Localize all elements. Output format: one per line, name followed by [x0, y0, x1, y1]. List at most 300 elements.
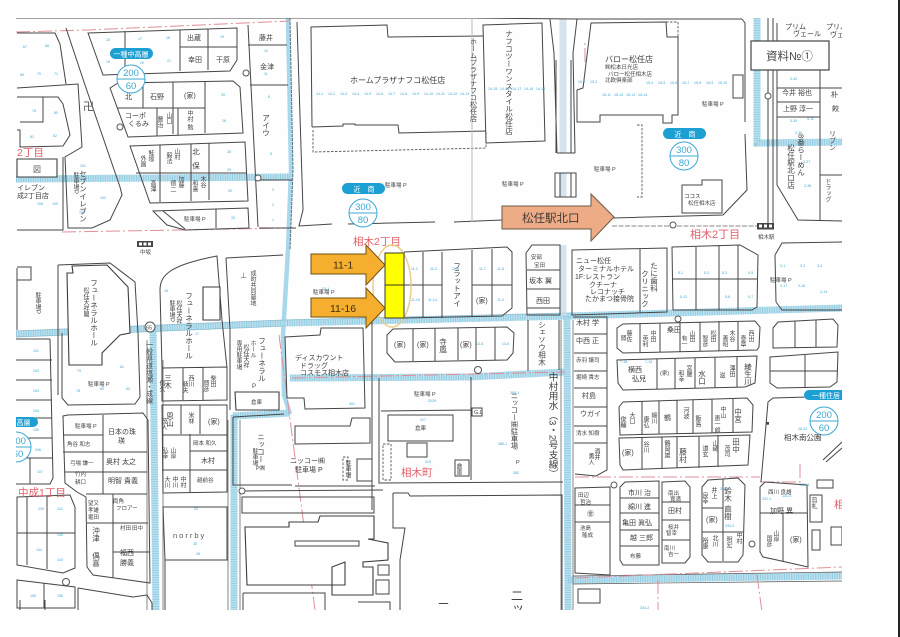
parcel numbers: 7-15	[645, 360, 652, 364]
map labels lower left: norrby	[173, 531, 206, 540]
map labels lower left: 日本の珠	[108, 427, 136, 436]
map labels centre: (家)	[417, 340, 429, 349]
parcel numbers: 330-2	[725, 524, 734, 528]
map labels centre: 中村用水（3・2号支線）	[546, 371, 558, 479]
map labels top left	[17, 33, 274, 472]
map labels top left: ニッコー	[256, 433, 266, 463]
map labels right: ヴェ	[830, 30, 844, 39]
map labels right: 駐車場 P	[594, 165, 616, 173]
parcel numbers: 105	[33, 428, 39, 432]
parcel numbers: 15-10	[718, 81, 727, 85]
map labels centre: ターミナルホテル	[578, 264, 634, 273]
map labels lower left: 勝義	[120, 558, 134, 567]
map labels lower left	[67, 374, 220, 568]
parcel numbers: 68	[45, 44, 49, 48]
map labels centre: (家)	[476, 296, 488, 305]
zone pill: 一種住居: 一種住居	[812, 391, 840, 400]
parcel numbers: 385-1	[510, 391, 519, 395]
map labels top left: 出蔵	[187, 33, 201, 42]
map labels right: 木村 学	[576, 318, 599, 327]
map labels centre: レコナッチ	[590, 288, 625, 296]
map labels top left: 保	[191, 162, 200, 171]
map labels lower left: 岡本 和久	[193, 439, 217, 447]
map labels right: 道玄	[701, 444, 708, 458]
map labels right: プリム	[826, 23, 847, 31]
map labels right: 南川	[664, 544, 675, 552]
map labels lower left: (家)	[208, 417, 220, 426]
map labels lower left: 耕口	[75, 478, 86, 486]
map labels right: 滋	[718, 371, 725, 379]
parcel numbers: 3-14	[820, 290, 827, 294]
parcel numbers: 331-1	[762, 497, 771, 501]
map labels lower left: 両角	[113, 497, 124, 505]
parcel numbers: 102	[100, 196, 106, 200]
zone circle: 300/80 right: 80	[679, 158, 689, 169]
map labels right: 桑田	[667, 325, 681, 334]
parcel numbers: 382	[513, 471, 519, 475]
map labels lower left: 瑛	[118, 436, 125, 445]
map labels right: 今井 裕也	[782, 88, 812, 97]
parcel numbers: 3-38	[795, 131, 802, 135]
map labels top left: 松任天祥閣	[82, 286, 89, 318]
map labels centre: コスモス相木店	[300, 368, 349, 377]
map labels centre: 坂本 翼	[529, 276, 552, 285]
map labels right: 駐車場 P	[770, 276, 792, 284]
map labels centre	[290, 30, 658, 615]
parcel numbers: 81	[120, 365, 124, 369]
map labels top left: 北	[191, 148, 200, 157]
map labels right: 明宏	[725, 536, 732, 549]
map labels top left: 金津	[260, 62, 274, 71]
map labels right: 西川 良雄	[768, 488, 792, 496]
parcel numbers: 2029	[428, 399, 436, 403]
parcel numbers: 104	[33, 409, 39, 413]
map labels centre: (家)	[460, 340, 472, 349]
map labels right: 酒井	[593, 447, 600, 461]
map labels lower left: 村田	[120, 524, 131, 532]
map labels centre: P	[516, 460, 520, 466]
parcel numbers: 139	[38, 507, 44, 511]
parcel numbers: 14-12	[448, 92, 457, 96]
parcel numbers: 14-19	[536, 87, 545, 91]
parcel numbers: 14-15	[488, 87, 497, 91]
map labels lower left: 奥村 太之	[106, 457, 136, 466]
map labels lower left: 中川	[171, 475, 178, 488]
parcel numbers: 14-10	[424, 92, 433, 96]
parcel numbers: 11-2	[411, 267, 418, 271]
map labels centre: G.L	[474, 410, 483, 416]
parcel numbers: 19	[220, 35, 224, 39]
map labels centre: シェソウ相木	[537, 321, 546, 367]
map labels top left: 中村	[186, 109, 193, 122]
parcel numbers: 8	[268, 95, 270, 99]
parcel numbers: 3	[272, 188, 274, 192]
map labels lower left: 柴田	[209, 374, 216, 388]
red district names: 相	[834, 498, 844, 511]
arrow: 11-16: 11-16	[330, 303, 356, 315]
parcel numbers: 3-36	[804, 184, 811, 188]
map labels right: ヴェール	[793, 29, 821, 38]
parcel numbers: 35	[193, 542, 197, 546]
parcel numbers: 14-7	[388, 92, 395, 96]
map labels right: 良幸	[701, 491, 708, 505]
red district names: 相木2丁目	[690, 228, 740, 241]
parcel numbers: 2	[272, 203, 274, 207]
map labels right: 餃	[832, 105, 839, 113]
zone pill: 近商 right	[663, 128, 706, 139]
parcel numbers: 14-2	[328, 92, 335, 96]
parcel numbers: 15-3	[590, 80, 597, 84]
parcel numbers: 3-39	[790, 119, 797, 123]
zone pill: 近商 left	[342, 183, 385, 194]
map labels top left: 毅法	[165, 151, 172, 165]
map labels centre: クチーナ	[589, 281, 617, 289]
map labels lower left: 信久	[158, 379, 165, 393]
map labels top left: 駐車場	[251, 447, 258, 467]
zone pill: lower left: 中高層	[10, 418, 30, 427]
map labels right: 宮腰	[685, 364, 692, 378]
map labels right: 河波	[682, 406, 689, 420]
parcel numbers: 11-7	[479, 267, 486, 271]
map labels lower left: 角谷 和志	[67, 440, 91, 448]
arrow: 松任駅北口	[502, 194, 614, 241]
parcel numbers: 30	[228, 189, 232, 193]
map labels right: 駐車場 P	[702, 100, 724, 108]
lot 11-1	[385, 253, 404, 285]
map labels right: 英利	[641, 334, 648, 347]
map labels right: 細川	[650, 411, 657, 424]
map labels top left: 勉	[186, 123, 193, 131]
zone circle: 300/80 right: 300	[676, 145, 692, 156]
parcel numbers: 5-8	[725, 295, 730, 299]
map labels centre: ニュー松任	[576, 256, 611, 265]
map labels top left: コーポ	[125, 112, 146, 120]
parcel numbers: 155	[30, 594, 36, 598]
parcel numbers: 7-16	[620, 360, 627, 364]
map labels top left: 加藤	[177, 175, 184, 189]
parcel numbers: 108	[37, 202, 43, 206]
map labels centre: ドラッグ	[300, 361, 328, 370]
map labels right: 赤羽 譲司	[576, 356, 600, 364]
parcel numbers: 15-13	[626, 93, 635, 97]
arrow: 松任駅北口: 松任駅北口	[522, 211, 580, 225]
map labels right: 俊輔	[619, 415, 626, 429]
map labels right: 上野 淳一	[783, 104, 813, 113]
map labels right: 越 三郎	[630, 533, 653, 542]
map labels right: 水口	[697, 369, 706, 385]
zone circle: 200/60 top left	[117, 65, 145, 93]
map labels lower left: 駐車場 P	[75, 422, 97, 430]
ellipse around lots	[373, 245, 411, 327]
map labels top left: くるみ	[128, 120, 149, 128]
parcel numbers: 5-5	[748, 271, 753, 275]
parcel numbers: 101	[33, 349, 39, 353]
map labels right: バロー松任店	[605, 54, 653, 64]
lot 11-16	[385, 285, 404, 318]
parcel numbers: 19	[106, 60, 110, 64]
red district names: 相木町	[401, 466, 433, 479]
centre left blocks	[16, 255, 292, 610]
red district names	[17, 147, 844, 511]
parcel numbers: 11-8	[497, 267, 504, 271]
map labels right: 雄	[663, 451, 670, 459]
map labels lower left: 三木	[163, 374, 172, 390]
map labels right: 清水 知樹	[576, 429, 600, 437]
map labels lower left: 堀田	[88, 513, 99, 521]
parcel numbers: 36	[196, 552, 200, 556]
parcel numbers: 80	[54, 111, 58, 115]
parcel numbers: 67	[23, 45, 27, 49]
map labels right: 田中	[732, 438, 740, 454]
map labels right: 勇人	[587, 452, 594, 465]
map labels right: 智幸	[666, 529, 678, 537]
map labels centre: ディスカウント	[295, 353, 344, 362]
map labels lower left: 田中	[132, 524, 143, 532]
map labels right: 直樹	[723, 504, 732, 521]
zone pill: 近商 right: 近 商	[674, 130, 696, 138]
parcel numbers: 331-4	[800, 483, 809, 487]
map labels right: ドラッグ	[824, 178, 831, 203]
map labels top left: ⊥	[240, 272, 247, 280]
map labels top left: フューネラルホール	[89, 279, 98, 346]
parcel numbers: 15-5	[658, 81, 665, 85]
zone circle: 300/80 left	[349, 199, 377, 227]
zone pill: 一種中高層	[110, 48, 153, 59]
zone circle: 300/80 right	[670, 142, 698, 170]
map labels right: 横西	[628, 365, 642, 374]
map labels right: 西出	[747, 330, 754, 343]
map labels top left: 高澤	[149, 179, 156, 193]
parcel numbers: 334-2	[640, 606, 649, 610]
zone circle: 300/80 left: 80	[358, 215, 368, 226]
map labels right: 北欧倶楽部	[605, 76, 633, 84]
parcel numbers: 33	[231, 216, 235, 220]
map labels top left: 卍	[83, 100, 94, 113]
map labels centre: ニッコー㈱駐車場	[510, 392, 520, 451]
parcel numbers: 79	[77, 369, 81, 373]
parcel numbers: 13-6	[502, 342, 509, 346]
highlighted lots	[373, 245, 411, 327]
map labels right: (家)	[706, 515, 718, 524]
parcel numbers: 14-11	[436, 92, 445, 96]
parcel numbers: 25	[221, 93, 225, 97]
map labels centre: ッ	[512, 601, 524, 615]
map labels right: 賢	[619, 335, 626, 342]
parcel numbers: 10	[264, 49, 268, 53]
parcel numbers: 103	[33, 389, 39, 393]
map labels top left: 幸田	[188, 56, 202, 64]
zone pill: 一種住居	[804, 390, 842, 400]
parcel numbers: 14-6	[376, 92, 383, 96]
map labels right: 桜井	[668, 523, 680, 531]
map labels right: 綿川 進	[628, 502, 651, 511]
map labels right: 朴	[831, 90, 838, 99]
map labels lower left: 沖津	[91, 526, 100, 543]
map labels top left: 和喜	[191, 179, 198, 193]
map labels right: 布藤	[630, 552, 642, 560]
map labels centre: 宝田	[534, 261, 545, 269]
map labels centre: 駐車場 P	[385, 181, 407, 189]
parcel numbers: 3-17	[780, 284, 787, 288]
parcel numbers: 70	[37, 72, 41, 76]
parcel numbers: 5	[270, 152, 272, 156]
box: 資料№①: 資料№①	[766, 49, 813, 63]
map labels lower left: 福西	[120, 548, 134, 557]
map labels right: 和幸	[677, 369, 684, 383]
map labels top left: 松任天祥	[242, 343, 249, 369]
map labels right: 中村	[735, 531, 742, 544]
parcel numbers: 14-17	[512, 87, 521, 91]
map labels centre: クリニック	[640, 270, 650, 308]
map labels lower left: 望又	[88, 500, 100, 507]
map labels top left: 木谷	[199, 175, 206, 189]
map labels lower left: 弓場 謙一	[70, 459, 94, 467]
map labels centre: 倉庫	[455, 463, 462, 476]
map labels right: 北川	[711, 534, 718, 547]
map labels right: 加野 異	[770, 506, 793, 515]
zone pill: lower left	[16, 417, 38, 427]
right top blocks	[775, 23, 842, 310]
map labels lower left: 西川	[187, 375, 194, 387]
zone circle: 200/60 right	[810, 407, 838, 435]
parcel numbers: 11	[264, 72, 268, 76]
map labels right: 藤村	[678, 447, 688, 463]
map labels right: 大口	[628, 411, 635, 425]
station signs and road markers	[62, 70, 774, 586]
map labels right: 弘兒	[632, 374, 646, 383]
parcel numbers: 3-3	[817, 264, 822, 268]
parcel numbers: 15-1	[322, 287, 329, 291]
map labels top left: 鮭塚	[147, 149, 154, 163]
map labels right: (家)	[660, 369, 669, 377]
parcel numbers: 385-1	[498, 442, 507, 446]
zone circle: 200/60 right: 60	[819, 423, 829, 434]
map labels centre: 安部	[531, 254, 543, 261]
factory buildings	[242, 490, 562, 610]
parcel numbers: 11-16	[411, 298, 420, 302]
parcel numbers: 16	[164, 289, 168, 293]
parcel numbers: 14-13	[460, 92, 469, 96]
parcel numbers: 106	[35, 448, 41, 452]
parcel numbers: 144	[36, 548, 42, 552]
map labels right: 山田	[688, 329, 695, 343]
map labels right: 飯島	[694, 415, 701, 428]
parcel numbers: 15-12	[614, 93, 623, 97]
map labels right: (家)	[790, 535, 802, 544]
parcel numbers: 14-8	[400, 92, 407, 96]
map labels centre: (家)	[394, 340, 406, 349]
parcel numbers: 14-1	[316, 92, 323, 96]
map labels right: 中西 正	[576, 336, 599, 345]
map labels right: (家)	[622, 448, 634, 457]
parcel numbers: 11-14	[428, 298, 437, 302]
map labels right: 堀崎 貴志	[576, 373, 600, 381]
map labels centre: たに歯科	[649, 262, 658, 293]
map labels right: 有一	[680, 334, 687, 347]
map labels right: 亀田 眞弘	[622, 518, 652, 527]
map labels right: 茂司	[723, 444, 730, 457]
map labels right: ㈱松本日光店	[605, 63, 639, 71]
parcel numbers: 5-7	[748, 295, 753, 299]
parcel numbers: 103	[79, 210, 85, 214]
parcel numbers: 419	[425, 460, 431, 464]
map labels right: 8番らーめん	[796, 134, 806, 176]
parcel numbers: 18	[166, 36, 170, 40]
parcel numbers: 5-12	[680, 295, 687, 299]
map labels top left: アイウ	[262, 114, 270, 137]
map labels top left: 石野	[150, 93, 164, 101]
parcel numbers: 109	[52, 202, 58, 206]
map labels right: 池島	[580, 524, 592, 532]
parcel numbers: 15-6	[670, 81, 677, 85]
map labels lower left: 米林	[187, 411, 194, 425]
map labels right: 鶴岡	[663, 439, 670, 453]
map labels lower left: 駐車場 P	[88, 380, 110, 388]
parcel numbers: 3-37	[803, 160, 810, 164]
map labels top left: フューネラル	[257, 337, 266, 382]
map labels top left: セブンイレブン	[78, 170, 88, 222]
map labels right: 綾生川	[743, 362, 752, 386]
map labels right: 山岸	[772, 529, 779, 543]
map labels centre: ニッコー㈱	[290, 456, 325, 465]
map labels top left: 豊治	[156, 115, 163, 129]
map labels centre: ホームプラザナフコ松任店	[470, 38, 477, 123]
parcel numbers: 14-16	[500, 87, 509, 91]
map labels right	[576, 23, 847, 560]
zone circle: 200/60 lower left: 60	[13, 449, 23, 460]
map frame and roads	[16, 18, 773, 395]
map labels lower left: 偶喜	[91, 551, 100, 568]
map labels lower left: 恩山	[165, 412, 174, 427]
map labels centre: 倉庫	[415, 424, 427, 432]
map labels right: 井上	[710, 486, 717, 499]
map labels lower left: フロアー	[116, 505, 138, 512]
arrow: 11-16	[311, 288, 385, 328]
parcel numbers: 5-1	[678, 271, 683, 275]
map labels top left: フューネラルホール	[184, 292, 194, 360]
parcel numbers: 1	[272, 218, 274, 222]
map labels right: 鈴木	[723, 486, 732, 503]
parcel numbers: 34	[194, 507, 198, 511]
map labels top left: 干原	[216, 56, 230, 64]
parcel numbers: 107	[37, 470, 43, 474]
parcel numbers: 28	[227, 150, 231, 154]
map labels right: 吉一	[668, 551, 680, 558]
top left blocks	[88, 28, 249, 230]
parcel numbers: 13-5	[476, 342, 483, 346]
map labels right: 谷川	[642, 440, 649, 453]
map labels right: ココス	[684, 193, 701, 200]
map labels top left: 駐車場P	[72, 171, 79, 194]
valor site	[577, 19, 760, 226]
parcel numbers: 15-11	[602, 93, 611, 97]
parcel numbers: 11-9	[497, 298, 504, 302]
map labels right: 善昭	[721, 334, 728, 348]
map labels centre: たかまつ接骨院	[585, 294, 634, 303]
map labels top left: 外園	[139, 154, 146, 168]
map labels right: ㊎	[587, 509, 594, 518]
parcel numbers: 76	[32, 109, 36, 113]
map labels centre: 駐車場 P	[414, 390, 436, 398]
map labels right: ■	[766, 421, 769, 427]
parcel numbers: 3-1	[780, 264, 785, 268]
parcel numbers: 3-11	[807, 117, 814, 121]
parcel numbers: 16	[106, 38, 110, 42]
map labels lower left: 越前谷	[197, 476, 214, 484]
parcel numbers: 83	[126, 387, 130, 391]
parcel numbers: 81	[30, 135, 34, 139]
map labels centre: フラットアイ	[452, 262, 462, 307]
